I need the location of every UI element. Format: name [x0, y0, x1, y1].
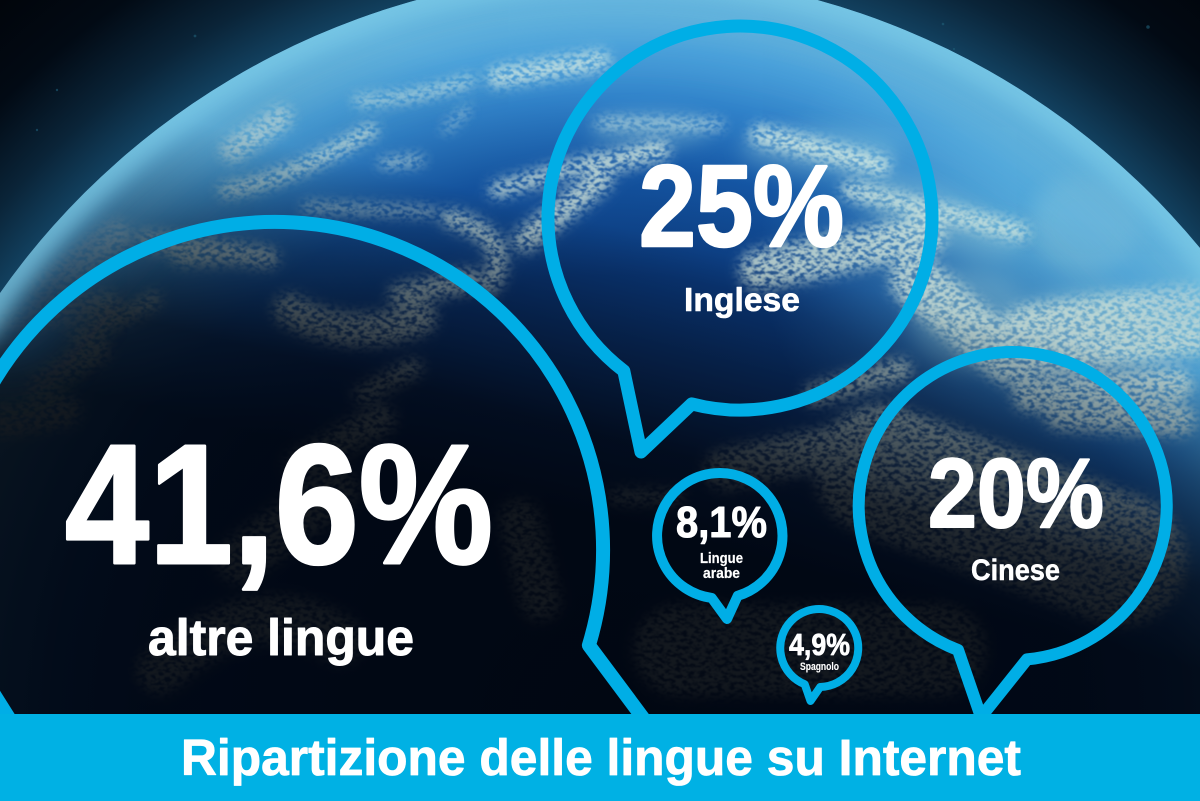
bubble: Cinese 20% — [859, 352, 1167, 717]
value: 41,6% — [65, 410, 493, 600]
label: altre lingue — [148, 609, 414, 666]
globe shading — [0, 97, 1200, 714]
outline — [657, 473, 782, 619]
outline — [548, 26, 932, 452]
bubble: Inglese 25% — [548, 26, 932, 452]
speckled cloud bands — [0, 60, 1190, 670]
label: Spagnolo — [800, 661, 839, 673]
value: 20% — [928, 438, 1104, 548]
outline — [859, 352, 1167, 717]
bubble: Lingue arabe 8,1% — [657, 473, 782, 619]
atmosphere rim — [0, 0, 1200, 339]
bubble: altre lingue 41,6% — [0, 222, 652, 730]
title bar — [0, 714, 1200, 801]
label: Cinese — [971, 554, 1060, 587]
outline — [0, 222, 652, 730]
cloud glow layer — [200, 52, 1200, 534]
value: 25% — [639, 141, 844, 271]
soft cloud haze — [590, 112, 1190, 375]
stars — [36, 23, 1150, 131]
bubble: Lingue arabe 8,1%: arabe — [703, 565, 740, 582]
value: 4,9% — [789, 627, 850, 662]
label: Lingue — [700, 550, 743, 567]
bubble: Spagnolo 4,9% — [780, 609, 858, 701]
value: 8,1% — [676, 498, 767, 547]
title: Ripartizione delle lingue su Internet — [181, 729, 1021, 786]
label: Inglese — [684, 281, 800, 318]
outline — [780, 609, 858, 701]
